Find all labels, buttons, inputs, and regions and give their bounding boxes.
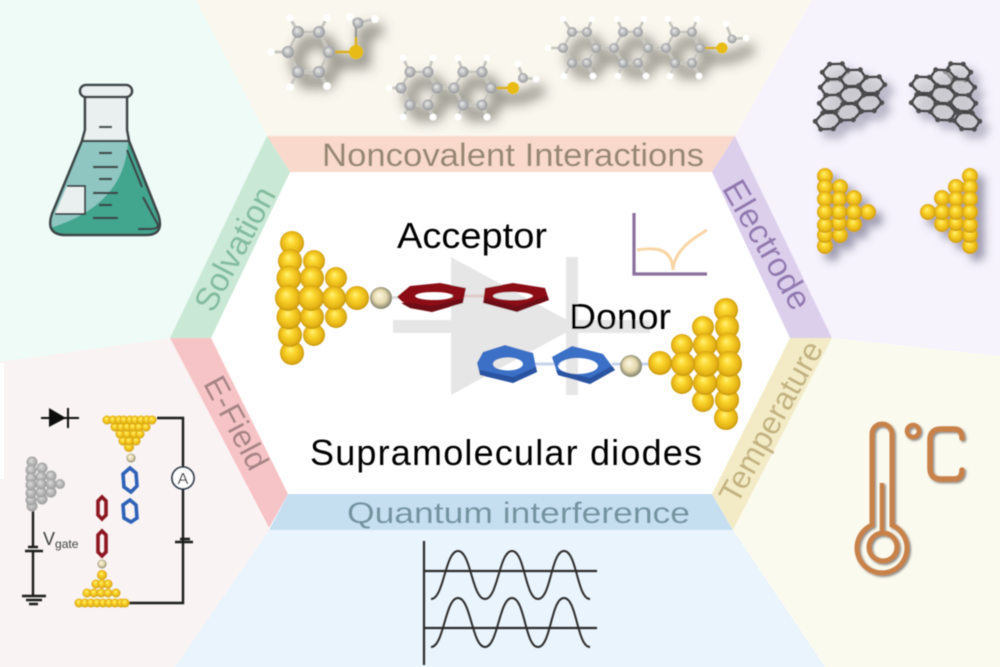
left gold cluster xyxy=(275,231,369,365)
acceptor molecule xyxy=(381,283,549,312)
band: solvation xyxy=(170,136,290,338)
molecule: terphenyl thioether xyxy=(545,16,754,79)
molecule: biphenyl thioether xyxy=(386,55,544,120)
top gold electrode xyxy=(102,416,156,452)
diagram: gate circuit xyxy=(22,408,194,608)
left linker atom xyxy=(370,287,392,309)
label: donor: Donor xyxy=(569,296,671,337)
band: e-field: E-Field xyxy=(197,370,276,476)
icon: thermometer with degrees Celsius xyxy=(857,424,962,573)
icon: gold electrode right xyxy=(920,168,978,254)
right linker atom xyxy=(620,355,642,377)
bottom gold electrode xyxy=(74,570,130,608)
ammeter xyxy=(172,467,194,489)
blue donor rings xyxy=(123,468,137,522)
band: solvation: Solvation xyxy=(186,180,283,317)
icon: flask xyxy=(50,85,160,235)
label: Vgate: V xyxy=(43,529,55,549)
icon: gold electrode left xyxy=(817,168,876,254)
panel: central hexagon xyxy=(211,172,790,494)
panel: noncovalent interactions background xyxy=(196,0,812,136)
band: e-field xyxy=(170,338,288,528)
icon: graphene flake left xyxy=(813,61,887,132)
label: acceptor: Acceptor xyxy=(397,215,547,256)
chart: interference waves xyxy=(424,541,597,665)
gate electrode xyxy=(26,456,65,512)
band: noncovalent interactions: Noncovalent Interactions xyxy=(322,137,704,173)
red acceptor rings xyxy=(98,497,106,556)
circuit wires xyxy=(22,418,183,604)
icon: diode symbol xyxy=(41,408,79,428)
panel: quantum interference background xyxy=(175,530,825,667)
ammeter: A xyxy=(178,471,189,488)
icon: graphene flake right xyxy=(909,61,982,132)
panel: e-field background xyxy=(0,338,269,667)
heading: supramolecular diodes: Supramolecular diodes xyxy=(310,432,702,473)
band: electrode xyxy=(712,136,832,338)
band: electrode: Electrode xyxy=(714,173,819,317)
panel: electrode background xyxy=(735,0,1000,356)
icon: gray diode symbol behind molecules xyxy=(393,257,650,395)
donor molecule xyxy=(477,345,650,384)
band: quantum interference xyxy=(269,494,733,530)
panel: solvation background xyxy=(0,0,267,362)
icon: mini rectification plot xyxy=(634,213,707,274)
right gold cluster xyxy=(648,298,742,430)
panel: temperature background xyxy=(733,338,1000,667)
battery xyxy=(175,539,193,542)
label: Vgate: gate xyxy=(55,537,79,551)
molecule: thioanisole xyxy=(267,13,383,91)
band: temperature: Temperature xyxy=(711,334,830,509)
band: quantum interference: Quantum interference xyxy=(347,497,690,530)
